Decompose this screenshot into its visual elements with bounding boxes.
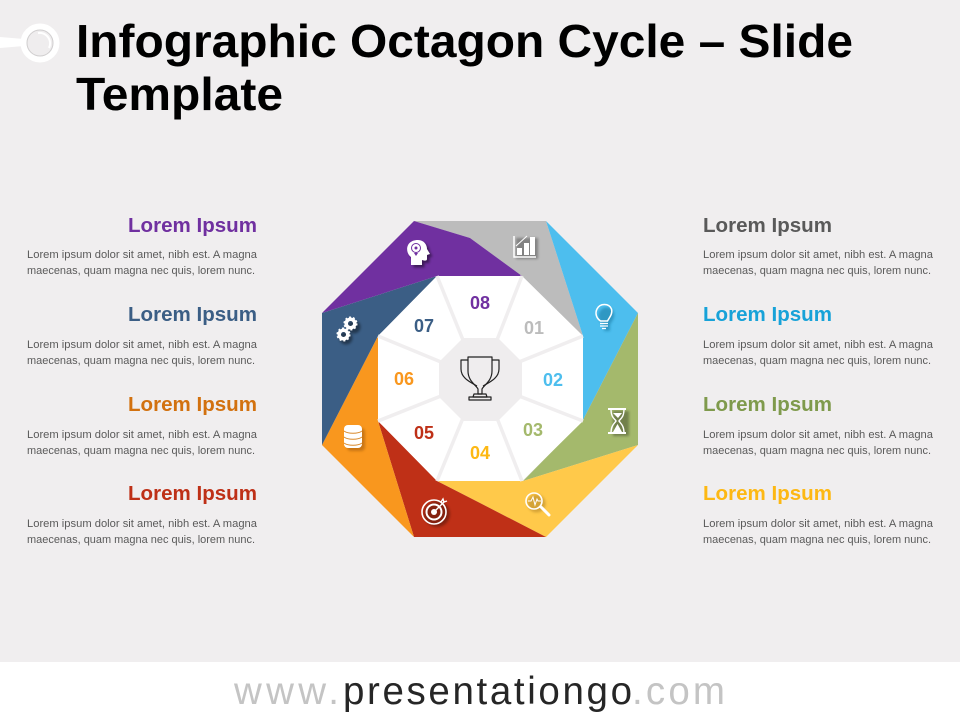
inner white octagon xyxy=(378,276,583,481)
left text 07: maecenas, quam magna nec quis, lorem nunc. xyxy=(27,355,255,367)
right text 04: maecenas, quam magna nec quis, lorem nunc. xyxy=(703,534,931,546)
left text 08: Lorem Ipsum xyxy=(128,214,257,237)
icon: head with bulb xyxy=(407,240,432,268)
right text 01 xyxy=(703,214,934,277)
left text 06: Lorem Ipsum xyxy=(128,393,257,416)
left text 05 xyxy=(27,482,258,546)
footer url: presentationgo xyxy=(343,670,632,713)
right text 04: Lorem ipsum dolor sit amet, nibh est. A magna xyxy=(703,518,934,530)
right text 02: Lorem Ipsum xyxy=(703,303,832,326)
icon: light bulb xyxy=(596,304,614,331)
right text 01: Lorem ipsum dolor sit amet, nibh est. A magna xyxy=(703,249,934,261)
blade 04 yellow xyxy=(437,445,638,537)
icon: database xyxy=(344,425,365,451)
right text 03: Lorem ipsum dolor sit amet, nibh est. A magna xyxy=(703,429,934,441)
title: Infographic Octagon Cycle – Slide xyxy=(76,15,853,67)
left text 05: maecenas, quam magna nec quis, lorem nunc. xyxy=(27,534,255,546)
numbers: 05 xyxy=(414,423,434,443)
footer band xyxy=(0,662,960,720)
blade 06 orange xyxy=(322,336,414,537)
blade 05 red xyxy=(378,421,546,537)
right text 03 xyxy=(703,393,934,457)
left text 06 xyxy=(27,393,258,457)
numbers xyxy=(394,293,563,463)
numbers: 03 xyxy=(523,420,543,440)
title xyxy=(76,15,853,120)
left text 05: Lorem Ipsum xyxy=(128,482,257,505)
right text 04: Lorem Ipsum xyxy=(703,482,832,505)
blade 03 green xyxy=(523,313,638,481)
footer url: .com xyxy=(632,670,725,713)
left text 06: maecenas, quam magna nec quis, lorem nunc. xyxy=(27,445,255,457)
icon: gears xyxy=(337,317,360,344)
right text 02: maecenas, quam magna nec quis, lorem nunc. xyxy=(703,355,931,367)
footer url xyxy=(233,670,725,713)
icon: bar chart xyxy=(514,236,538,259)
blade 07 navy xyxy=(322,276,437,445)
spokes and hub xyxy=(378,276,583,481)
numbers: 06 xyxy=(394,369,414,389)
numbers: 02 xyxy=(543,370,563,390)
pin decoration xyxy=(0,26,56,60)
icon: trophy xyxy=(461,357,499,400)
blade 08 purple xyxy=(322,221,522,313)
right text 03: maecenas, quam magna nec quis, lorem nunc. xyxy=(703,445,931,457)
footer url: www. xyxy=(233,670,339,713)
right text 01: Lorem Ipsum xyxy=(703,214,832,237)
blade 01 gray xyxy=(414,221,583,336)
left text 07: Lorem ipsum dolor sit amet, nibh est. A magna xyxy=(27,339,258,351)
right text 02: Lorem ipsum dolor sit amet, nibh est. A magna xyxy=(703,339,934,351)
left text 07: Lorem Ipsum xyxy=(128,303,257,326)
right text 04 xyxy=(703,482,934,546)
left text 08 xyxy=(27,214,258,277)
icon: target xyxy=(422,499,450,527)
right text 03: Lorem Ipsum xyxy=(703,393,832,416)
numbers: 01 xyxy=(524,318,544,338)
icon: hourglass xyxy=(608,409,629,436)
right text 02 xyxy=(703,303,934,367)
left text 06: Lorem ipsum dolor sit amet, nibh est. A magna xyxy=(27,429,258,441)
numbers: 04 xyxy=(470,443,490,463)
left text 08: Lorem ipsum dolor sit amet, nibh est. A magna xyxy=(27,249,258,261)
icon: magnifier xyxy=(526,493,549,515)
numbers: 07 xyxy=(414,316,434,336)
left text 08: maecenas, quam magna nec quis, lorem nunc. xyxy=(27,265,255,277)
right text 01: maecenas, quam magna nec quis, lorem nunc. xyxy=(703,265,931,277)
octagon cycle xyxy=(322,221,638,537)
blade 02 blue xyxy=(546,221,638,420)
title: Template xyxy=(76,68,283,120)
numbers: 08 xyxy=(470,293,490,313)
left text 05: Lorem ipsum dolor sit amet, nibh est. A magna xyxy=(27,518,258,530)
left text 07 xyxy=(27,303,258,367)
